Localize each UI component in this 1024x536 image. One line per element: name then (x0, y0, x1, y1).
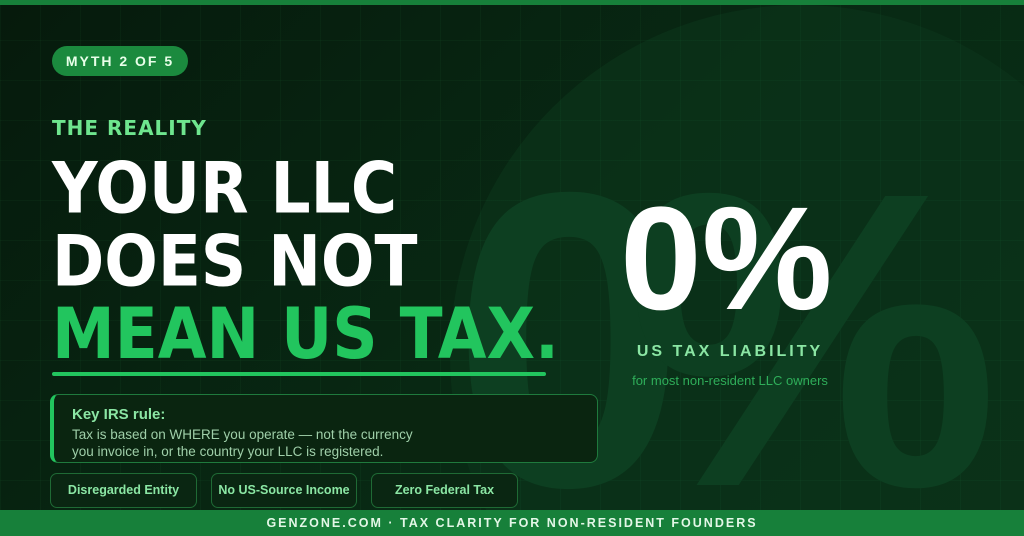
headline: YOUR LLC (52, 148, 397, 229)
footer bar (0, 510, 1024, 536)
stat label: US TAX LIABILITY (637, 343, 823, 360)
headline (51, 148, 559, 375)
callout: key IRS rule: Key IRS rule: (72, 406, 165, 423)
tag: zero federal tax: Zero Federal Tax (395, 483, 494, 497)
tag: no US-source income (211, 473, 357, 508)
headline: DOES NOT (52, 220, 417, 302)
tag: disregarded entity: Disregarded Entity (68, 483, 179, 497)
big stat 0%: 0% (620, 177, 832, 341)
tag: zero federal tax (371, 473, 518, 508)
stat sublabel: for most non-resident LLC owners (632, 373, 828, 388)
callout: key IRS rule: Tax is based on WHERE you operate — not the currency (72, 427, 413, 442)
top bar (0, 0, 1024, 5)
callout: key IRS rule (50, 394, 598, 463)
badge: myth 2 of 5: MYTH 2 OF 5 (66, 53, 174, 69)
callout: key IRS rule: you invoice in, or the country your LLC is registered. (72, 444, 383, 459)
label: the reality: THE REALITY (52, 116, 207, 140)
tag: no US-source income: No US-Source Income (218, 483, 350, 497)
tag: disregarded entity (50, 473, 197, 508)
headline underline (52, 372, 546, 376)
badge: myth 2 of 5 (52, 46, 188, 76)
footer bar: GENZONE.COM · TAX CLARITY FOR NON-RESIDENT FOUNDERS (266, 516, 758, 530)
headline: MEAN US TAX. (52, 293, 559, 375)
